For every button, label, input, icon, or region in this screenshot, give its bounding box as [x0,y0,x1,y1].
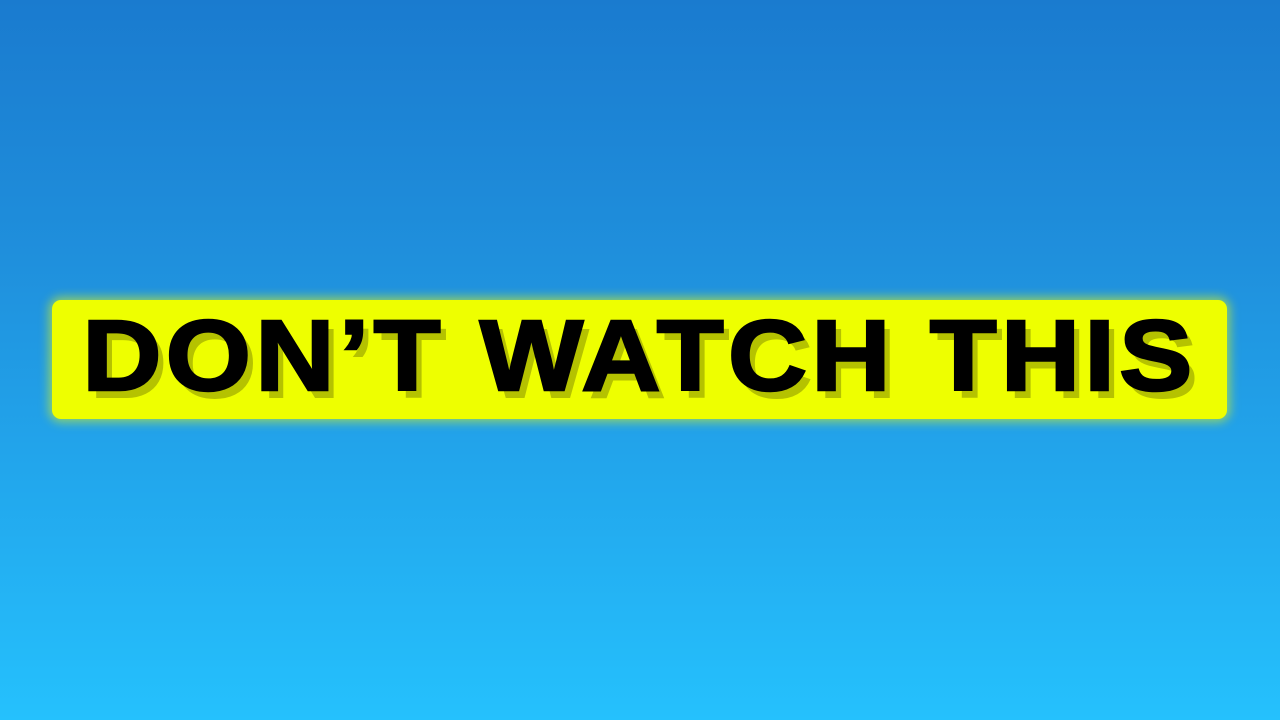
banner: yellow highlight box [52,300,1227,419]
title: DON’T WATCH THIS [82,300,1197,412]
